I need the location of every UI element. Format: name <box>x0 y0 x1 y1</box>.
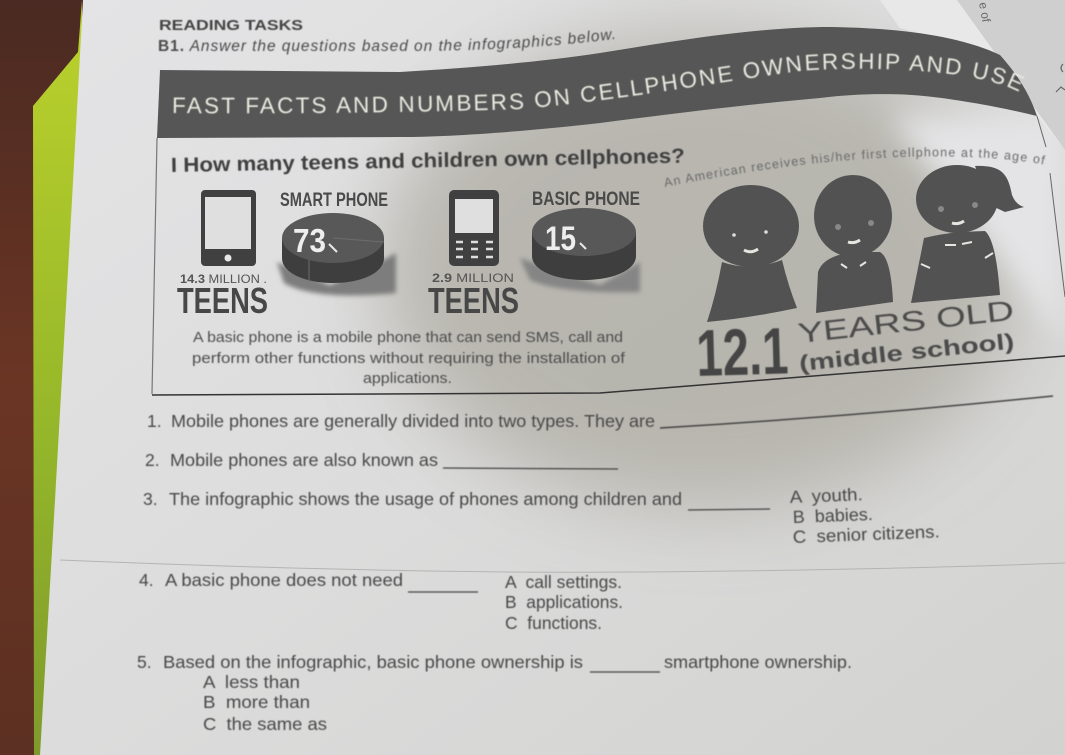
child two <box>814 175 893 313</box>
question 1 <box>147 396 1053 431</box>
question 3: 3. <box>143 489 158 509</box>
question 1: Mobile phones are generally divided into two types. They are <box>171 411 655 431</box>
questions <box>137 396 1053 734</box>
question 5: smartphone ownership. <box>664 652 852 672</box>
basic phone label: BASIC PHONE <box>532 189 640 210</box>
basic phone description: A basic phone is a mobile phone that can send SMS, call and <box>193 330 623 346</box>
basic phone description <box>192 330 626 387</box>
paper crease <box>60 560 1065 572</box>
child one <box>703 185 799 322</box>
pie chart: 73 percent <box>277 213 396 296</box>
value 73: 73 <box>293 222 326 259</box>
question 4: A basic phone does not need <box>165 570 403 590</box>
question 4: 4. <box>139 570 154 590</box>
child three <box>911 165 1024 303</box>
value 12.1: 12.1 <box>695 313 789 390</box>
question 5: B more than <box>203 692 310 712</box>
pie chart: 15 percent <box>520 208 640 292</box>
question 2 <box>145 450 618 470</box>
years old label: YEARS OLD <box>796 295 1015 349</box>
question 5: A less than <box>203 672 300 692</box>
age caption: An American receives his/her first cellphone at the age of <box>664 146 1046 188</box>
basic phone million label: 2.9 MILLION <box>432 271 514 285</box>
smartphone label: SMART PHONE <box>280 190 388 211</box>
icon: smartphone <box>201 190 256 266</box>
title banner <box>157 27 1037 138</box>
value 15: 15 <box>545 220 576 258</box>
panel: smartphone <box>177 190 396 321</box>
reading tasks heading: READING TASKS <box>159 17 303 34</box>
question 5: 5. <box>137 652 152 672</box>
question 3: A youth. <box>789 484 863 507</box>
page fold at top right <box>880 0 1065 150</box>
icon: basic phone <box>449 190 499 266</box>
question 2: Mobile phones are also known as <box>170 450 438 470</box>
banner title text: FAST FACTS AND NUMBERS ON CELLPHONE OWNERSHIP AND USE <box>173 52 1024 114</box>
question 2: 2. <box>145 450 160 470</box>
basic phone teens label: TEENS <box>428 280 519 321</box>
background: lime folder <box>33 0 82 755</box>
basic phone description: applications. <box>363 371 452 387</box>
shadow on paper <box>380 30 1020 510</box>
illustration: three children <box>703 165 1024 322</box>
smartphone teens label: TEENS <box>177 280 268 321</box>
light wedge on paper <box>890 115 1065 345</box>
question 4: A call settings. <box>505 572 622 592</box>
text showing through from next page: e of <box>976 1 993 24</box>
section heading: I How many teens and children own cellphones? <box>171 145 685 177</box>
question 3 <box>143 484 940 547</box>
instruction line: B1. Answer the questions based on the infographics below. <box>158 30 615 56</box>
statistic: average age <box>695 295 1015 390</box>
question 5: C the same as <box>203 714 327 734</box>
question 1: 1. <box>147 411 162 431</box>
infographic frame lines <box>152 116 1065 395</box>
question 5: Based on the infographic, basic phone ownership is <box>163 652 583 672</box>
basic phone description: perform other functions without requiring the installation of <box>192 351 626 367</box>
middle school label: (middle school) <box>798 329 1015 376</box>
panel: basic phone <box>428 189 640 321</box>
question 5 <box>137 652 852 734</box>
question 3: The infographic shows the usage of phones among children and <box>169 489 682 509</box>
question 4: B applications. <box>505 592 623 612</box>
smartphone million label: 14.3 MILLION . <box>180 272 267 286</box>
question 4: C functions. <box>505 613 602 633</box>
question 3: B babies. <box>792 504 873 527</box>
question 3: C senior citizens. <box>792 521 940 547</box>
question 4 <box>139 570 623 633</box>
